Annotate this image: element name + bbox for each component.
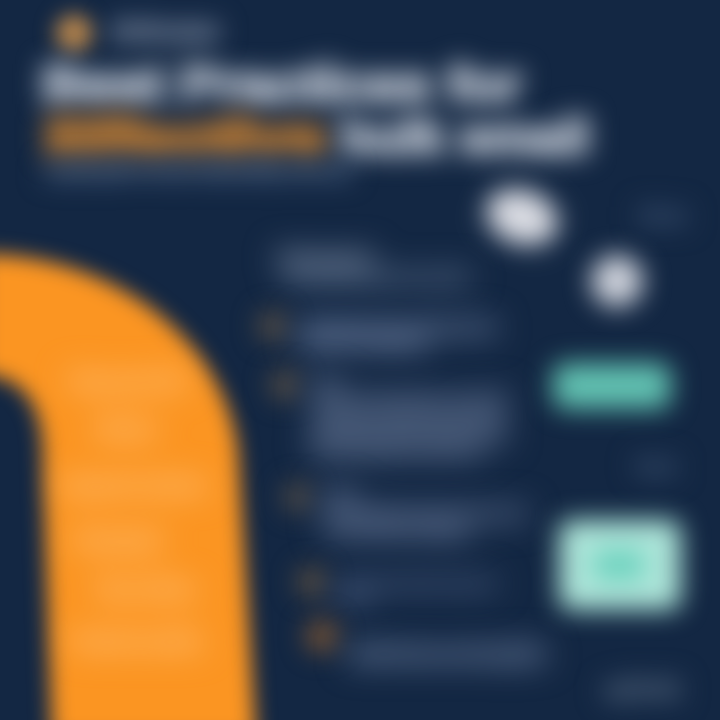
title: line one: Best Practices for [42,56,522,114]
item 3 text: Warm [312,375,342,392]
icon: white envelope blob [478,179,566,255]
icon: bullet 6 [306,620,338,652]
list item 6 [306,620,545,664]
card: mint box: 98% [600,555,640,577]
faint label top right: Inbox [640,206,684,226]
brand name: CPHProduct [110,19,218,46]
item 4 text: and avoid spam triggers [325,523,470,540]
item 2 text [299,319,496,351]
item 5 text: fast [338,590,369,605]
item 3 text: and raise your daily volume slowly [312,409,502,426]
arch text [62,371,207,653]
icon: bullet 4 [283,482,313,512]
item 6 text: Monitor bounces and complaints [350,644,545,664]
arch text: Personal [75,527,160,554]
item 4 text [322,487,526,540]
header: logo [55,14,218,52]
item 5 text [338,575,496,605]
item 2 text: with SPF and DKIM [299,335,425,351]
badge: teal bar [553,363,671,409]
arch text: Test often [95,579,195,601]
item 2 text: Authenticate your sending domain [300,319,496,336]
icon: bullet 5 [297,567,327,597]
arch text: Keep your list [70,371,185,393]
item 5 text: Respect unsubscribe requests [338,575,496,592]
badge label: Delivered [572,379,652,396]
list item 1: Send only to people who opted in [285,269,470,286]
list item 1: Get consent [278,249,370,269]
item 3 text [312,375,507,460]
card inner value [594,550,644,580]
list item 5 [297,567,496,605]
list item 3 [270,370,507,460]
list item 1 [278,249,470,286]
list item 4 [283,482,526,540]
faint label middle right: Open [636,456,676,476]
list item 2 [258,311,496,351]
arch text: Segment contacts [62,475,207,497]
card: mint box [559,520,681,610]
icon: white circle [591,255,643,307]
icon: bullet 2 [258,311,288,341]
footer note: cphbulk [605,679,678,701]
item 3 text: up new sending addresses gradually [312,391,507,408]
subtitle: A quick guide to better deliverability and reach [45,161,350,180]
item 4 text: clear subject lines that match content [322,505,526,522]
arch text: clean [95,416,155,441]
title: line two end: bulk email [340,109,590,165]
title: line two highlight: Effective [46,109,326,165]
arch text: Track results [72,631,202,653]
panel: orange arch [0,254,256,720]
icon: bullet 3 [270,370,300,400]
item 3 text: to build a trusted reputation with [312,427,507,444]
item 4 text: Write [325,487,357,504]
item 3 text: inbox providers over time [312,443,482,460]
